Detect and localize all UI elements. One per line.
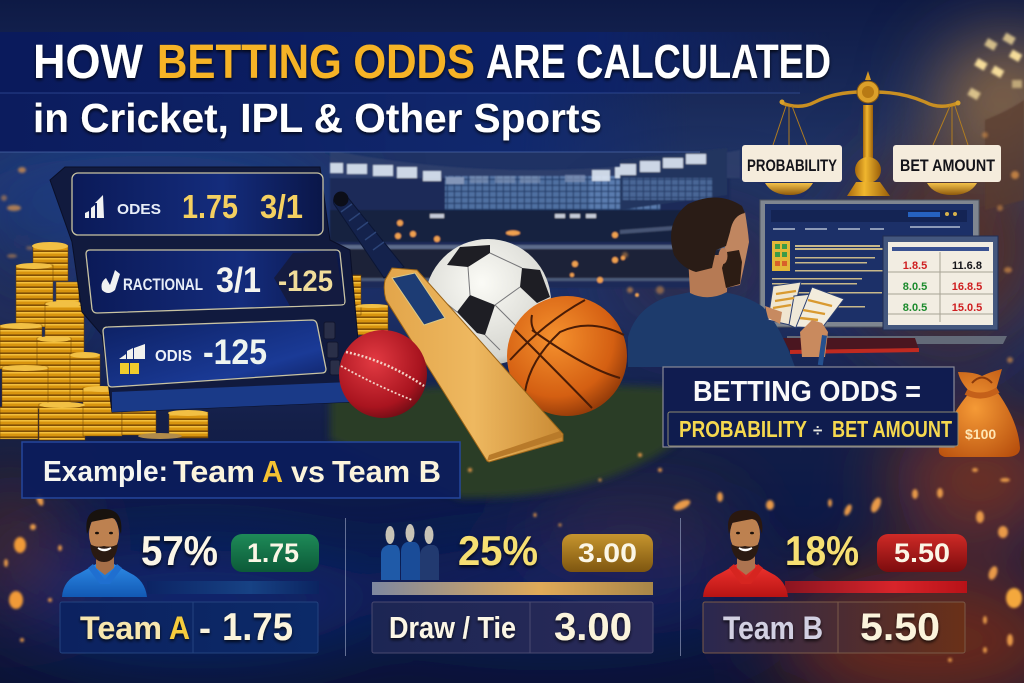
example box: A (262, 454, 283, 489)
odds bar B (785, 581, 967, 593)
avatar: team B player (703, 510, 788, 597)
percentage draw: 25% (458, 527, 538, 574)
pill draw (562, 534, 653, 572)
label box draw: Draw / Tie (389, 610, 516, 645)
label: probability: PROBABILITY (747, 156, 838, 175)
gold coin stacks (0, 242, 388, 440)
stadium stands (330, 100, 1024, 297)
money bag (939, 369, 1020, 457)
panel: fractional odds: RACTIONAL (123, 276, 203, 294)
basketball (507, 296, 627, 416)
warm stands on the right (985, 100, 1024, 210)
cricket ball (339, 330, 427, 418)
example box: Example: (43, 456, 168, 488)
example box: Team (173, 454, 255, 489)
stands behind the person (620, 148, 727, 210)
odds table (883, 236, 998, 330)
formula (668, 412, 958, 446)
title line 1: HOW (33, 36, 144, 89)
panel: decimal odds (72, 173, 323, 235)
section dividers (346, 518, 680, 656)
example box: Team B (332, 454, 441, 489)
odds bar draw (372, 582, 653, 595)
icon: note (102, 270, 120, 293)
pill draw: 3.00 (578, 538, 637, 568)
avatar: team A player (62, 509, 147, 597)
bat label (392, 273, 445, 325)
panel: moneyline odds (103, 320, 326, 387)
odds board (50, 167, 358, 412)
panel: decimal odds: 1.75 (182, 188, 238, 225)
laptop base (787, 336, 1007, 344)
balance scale (742, 71, 1001, 196)
formula: BET AMOUNT (832, 416, 952, 442)
column: team A (60, 509, 319, 653)
label box draw (372, 602, 653, 653)
label: bet amount: BET AMOUNT (900, 156, 996, 175)
monitor with odds site (760, 200, 1007, 354)
panel: moneyline odds: -125 (203, 333, 267, 372)
formula: ÷ (813, 421, 822, 440)
neck (688, 255, 728, 297)
column: draw (372, 524, 653, 653)
panel: decimal odds: 3/1 (260, 188, 303, 225)
cricket bat (333, 192, 563, 462)
label box A: Team (80, 610, 162, 646)
subtitle: in Cricket, IPL & Other Sports (33, 95, 602, 141)
hair (671, 197, 745, 272)
percentage B: 18% (785, 527, 859, 574)
sparks: stadium lights and embers (1, 132, 1022, 662)
pill B: 5.50 (894, 538, 950, 568)
label box A (60, 602, 318, 653)
odds table: 8.0.5 (903, 281, 927, 293)
label box B (703, 602, 965, 653)
pill A (231, 534, 319, 572)
icon: bars and squares (119, 344, 145, 374)
formula box: BETTING ODDS = (693, 376, 921, 408)
odds table: 8.0.5 (903, 302, 927, 314)
label box A: - (199, 607, 211, 648)
label box A: 1.75 (222, 606, 293, 649)
field grass (330, 384, 680, 498)
icon: rising bars (85, 195, 104, 218)
title band (0, 32, 831, 152)
person with betting slips (628, 197, 844, 367)
label box B: 5.50 (860, 606, 940, 649)
soccer ball (425, 239, 551, 365)
panel: fractional odds (86, 250, 345, 313)
odds table: 16.8.5 (952, 281, 982, 293)
panel: fractional odds: -125 (278, 265, 333, 298)
face profile (722, 212, 749, 288)
pill A: 1.75 (247, 538, 299, 568)
odds table: 1.8.5 (903, 260, 927, 272)
icon: three figures (381, 524, 439, 580)
beard (722, 250, 742, 288)
board side buttons (324, 322, 340, 375)
label box A: A (169, 610, 190, 646)
ear (718, 248, 728, 264)
odds bar A (147, 581, 319, 594)
percentage A: 57% (141, 527, 218, 574)
odds table: 15.0.5 (952, 302, 982, 314)
title line 1: BETTING ODDS (157, 36, 475, 89)
formula: PROBABILITY (679, 416, 807, 442)
column: team B (703, 510, 967, 653)
example box (22, 442, 460, 498)
title line 1: ARE CALCULATED (486, 36, 831, 89)
formula box (663, 367, 958, 447)
label: bet amount (893, 145, 1001, 182)
example box: vs (291, 456, 325, 489)
pill B (877, 534, 967, 572)
panel: moneyline odds: ODIS (155, 348, 192, 365)
label: probability (742, 145, 842, 182)
panel: fractional odds: 3/1 (216, 261, 261, 300)
title line 1 (33, 36, 831, 89)
panel: decimal odds: ODES (117, 201, 161, 218)
money bag: $100 (965, 426, 996, 442)
odds table: 11.6.8 (952, 260, 982, 272)
label box draw: 3.00 (554, 606, 632, 649)
betting slips (768, 282, 844, 328)
label box B: Team B (723, 610, 823, 646)
